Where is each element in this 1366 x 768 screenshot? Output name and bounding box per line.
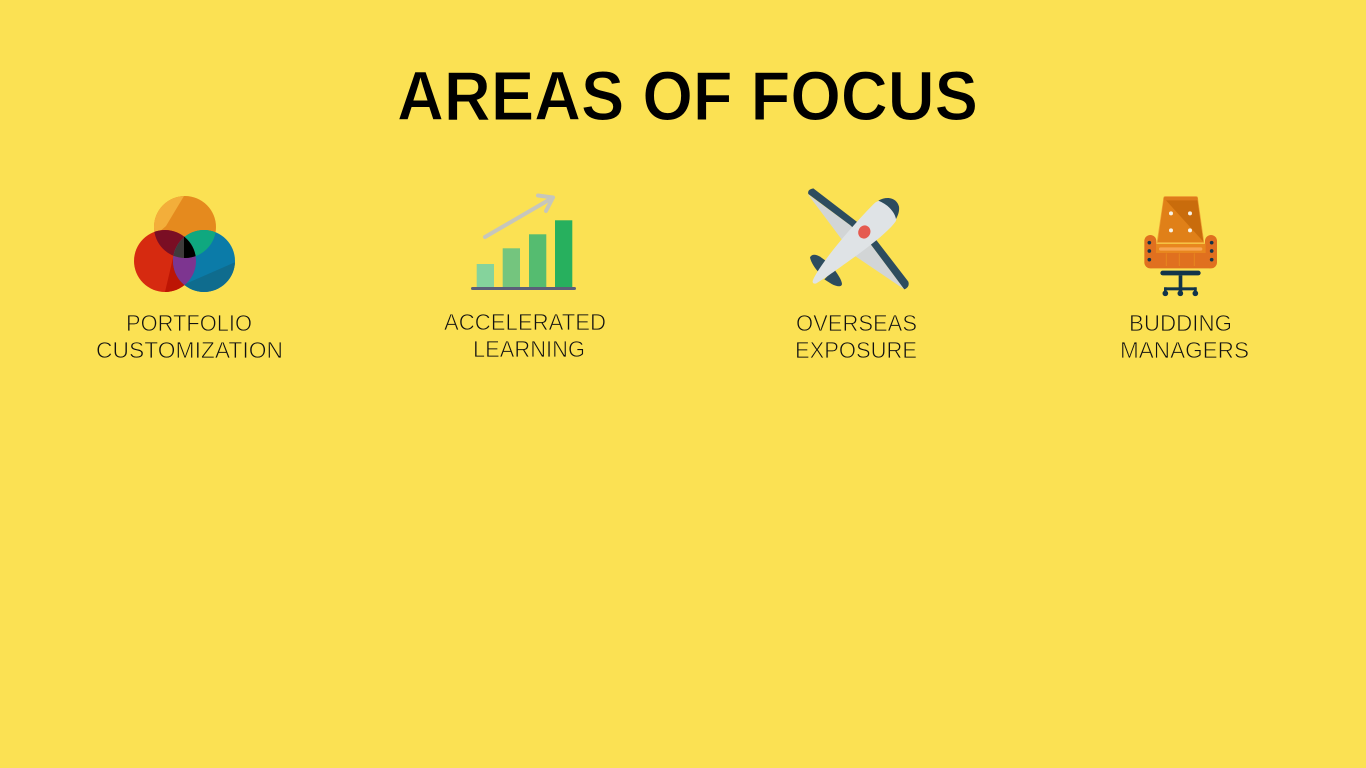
label: budding managers xyxy=(1120,310,1249,363)
title: AREAS OF FOCUS xyxy=(397,57,978,135)
label: accelerated learning: LEARNING xyxy=(473,336,585,362)
label: accelerated learning xyxy=(444,309,606,362)
label: accelerated learning: ACCELERATED xyxy=(444,309,606,335)
label: overseas exposure: OVERSEAS xyxy=(796,310,917,336)
panel: accelerated learning xyxy=(444,196,606,362)
icon: airplane xyxy=(808,188,909,289)
label: portfolio customization: PORTFOLIO xyxy=(126,310,252,336)
label: portfolio customization: CUSTOMIZATION xyxy=(96,337,283,363)
panel: budding managers xyxy=(1120,196,1249,363)
label: budding managers: BUDDING xyxy=(1129,310,1232,336)
icon: office chair xyxy=(1144,196,1217,296)
label: overseas exposure xyxy=(795,310,917,363)
panel: overseas exposure xyxy=(795,188,917,363)
icon: venn diagram xyxy=(134,196,240,295)
label: overseas exposure: EXPOSURE xyxy=(795,337,917,363)
label: budding managers: MANAGERS xyxy=(1120,337,1249,363)
panel: portfolio customization xyxy=(96,196,283,363)
icon: rising bar chart xyxy=(471,196,576,290)
label: portfolio customization xyxy=(96,310,283,363)
